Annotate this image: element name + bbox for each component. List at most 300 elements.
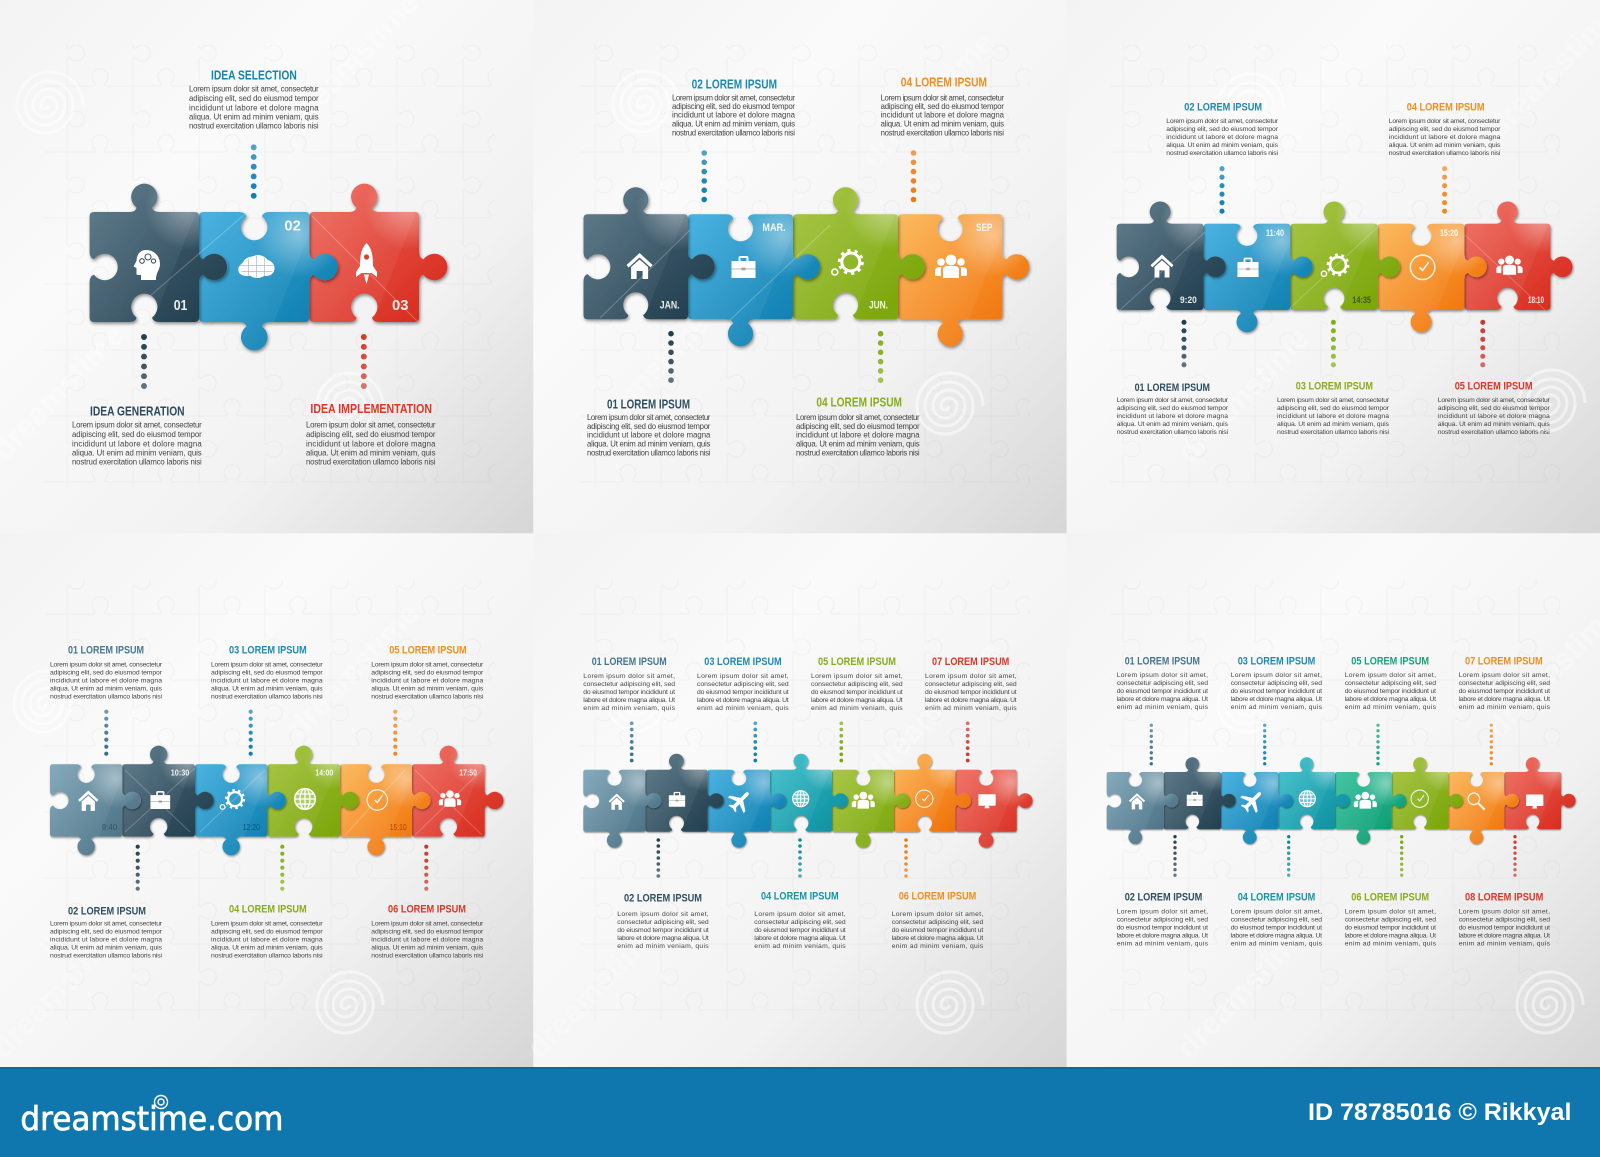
label JAN: JAN. xyxy=(660,299,680,311)
heading: 02: 02 LOREM IPSUM xyxy=(1125,891,1202,903)
text block: 07: enim ad minim veniam, quis xyxy=(1459,704,1551,711)
puzzle piece 7 red xyxy=(955,770,1033,848)
heading: 05: 05 LOREM IPSUM xyxy=(389,645,467,657)
dotted connector: 03 xyxy=(753,721,757,762)
text block: idea implementation: incididunt ut labore et dolore magna xyxy=(306,439,436,448)
text block: idea generation: Lorem ipsum dolor sit amet, consectetur xyxy=(72,421,202,430)
panel: five step puzzle timeline xyxy=(1067,0,1600,533)
text block: 07 xyxy=(925,673,1017,712)
text block: 03: aliqua. Ut enim ad minim veniam, quis xyxy=(1277,421,1390,428)
puzzle piece 1 slate xyxy=(584,187,715,319)
text block: 02: labore et dolore magna aliqua. Ut xyxy=(617,935,709,942)
heading: 04 green: 04 LOREM IPSUM xyxy=(816,394,902,409)
text block: 03: do eiusmod tempor incididunt ut xyxy=(1231,688,1322,695)
dotted connector: 06 xyxy=(424,845,428,891)
logo spiral xyxy=(154,1096,168,1108)
puzzle piece 7 orange xyxy=(1448,772,1519,844)
text block: 05: nostrud exercitation ullamco laboris nisi xyxy=(371,694,484,700)
puzzle piece 1 slate xyxy=(1117,201,1226,310)
text block: 04 orange: aliqua. Ut enim ad minim veniam, quis xyxy=(881,120,1004,129)
text block: idea selection: aliqua. Ut enim ad minim veniam, quis xyxy=(189,112,319,121)
text block: 01: Lorem ipsum dolor sit amet, consectetur xyxy=(1117,397,1229,404)
dotted connector: 05 xyxy=(393,710,397,756)
text block: 03: Lorem ipsum dolor sit amet, xyxy=(1231,672,1322,679)
puzzle piece 8 red xyxy=(1504,757,1576,829)
panel: seven step puzzle timeline: dreamstime xyxy=(860,635,1006,785)
dotted connector: 04 xyxy=(1287,835,1290,877)
text block: 05: nostrud exercitation ullamco laboris nisi xyxy=(1438,429,1550,436)
icon: people xyxy=(439,790,461,807)
heading: idea selection: IDEA SELECTION xyxy=(211,67,297,82)
puzzle piece 5 emerald xyxy=(1335,772,1406,844)
text block: 03: adipiscing elit, sed do eiusmod tempor xyxy=(1277,405,1390,412)
icon: gears xyxy=(832,250,862,275)
icon: home xyxy=(627,253,653,279)
text block: 07: consectetur adipiscing elit, sed xyxy=(925,681,1017,688)
text block: 04: incididunt ut labore et dolore magna xyxy=(211,936,323,944)
dotted connector: 04 green xyxy=(878,331,883,383)
text block: 03: labore et dolore magna aliqua. Ut xyxy=(697,697,789,704)
text block: 01 xyxy=(587,413,711,457)
icon: briefcase xyxy=(1187,791,1203,806)
text block: 04: enim ad minim veniam, quis xyxy=(754,943,846,950)
icon: briefcase xyxy=(669,792,685,807)
label 9:40: 9:40 xyxy=(102,822,118,832)
text block: idea selection: incididunt ut labore et dolore magna xyxy=(189,103,319,112)
puzzle piece 5 red xyxy=(1464,201,1573,310)
puzzle piece 4 green xyxy=(267,746,359,837)
text block: 07 xyxy=(1459,672,1551,711)
text block: 02: adipiscing elit, sed do eiusmod tempor xyxy=(672,102,795,111)
text block: 03: Lorem ipsum dolor sit amet, consectetur xyxy=(211,662,323,668)
label 03: 03 xyxy=(392,297,408,314)
heading: idea implementation: IDEA IMPLEMENTATION xyxy=(310,401,432,416)
dotted connector: idea generation xyxy=(141,334,147,389)
text block: 04: labore et dolore magna aliqua. Ut xyxy=(1231,932,1322,940)
heading: 07: 07 LOREM IPSUM xyxy=(1465,655,1543,667)
text block: 08: consectetur adipiscing elit, sed xyxy=(1459,916,1550,924)
text block: 05: labore et dolore magna aliqua. Ut xyxy=(811,697,903,704)
heading: 08: 08 LOREM IPSUM xyxy=(1465,891,1543,903)
puzzle piece 1 light slate xyxy=(583,770,661,848)
text block: 06: Lorem ipsum dolor sit amet, consectetur xyxy=(371,920,484,928)
text block: 05: incididunt ut labore et dolore magna xyxy=(371,678,484,684)
logo text: dreamstime.com xyxy=(20,1099,283,1138)
text block: 03: consectetur adipiscing elit, sed xyxy=(697,681,789,688)
text block: 06: do eiusmod tempor incididunt ut xyxy=(1345,924,1436,932)
heading: 02: 02 LOREM IPSUM xyxy=(624,892,702,904)
text block: idea selection: adipiscing elit, sed do eiusmod tempor xyxy=(189,94,319,103)
panel: eight step puzzle timeline xyxy=(1067,533,1600,1067)
footer banner xyxy=(0,1067,1600,1157)
puzzle piece 4 teal xyxy=(770,754,848,832)
text block: 01: adipiscing elit, sed do eiusmod tempor xyxy=(587,422,711,431)
puzzle piece 4 orange xyxy=(898,214,1029,346)
text block: 01: enim ad minim veniam, quis xyxy=(583,705,676,712)
text block: 03: nostrud exercitation ullamco laboris nisi xyxy=(211,694,323,700)
text block: 05: aliqua. Ut enim ad minim veniam, quis xyxy=(371,686,484,692)
puzzle piece 6 red xyxy=(412,746,503,837)
label 9:20: 9:20 xyxy=(1180,295,1197,305)
puzzle piece 1 light slate xyxy=(50,764,141,855)
text block: 04: consectetur adipiscing elit, sed xyxy=(1231,916,1322,924)
heading: 04: 04 LOREM IPSUM xyxy=(761,891,839,903)
text block: idea selection: nostrud exercitation ullamco laboris nisi xyxy=(189,122,319,131)
dotted connector: 03 xyxy=(249,710,253,756)
icon: globe xyxy=(295,789,315,809)
text block: 03: incididunt ut labore et dolore magna xyxy=(211,678,323,684)
text block: 01: nostrud exercitation ullamco laboris nisi xyxy=(587,448,711,457)
label 14:35: 14:35 xyxy=(1352,295,1371,305)
text block: 08: do eiusmod tempor incididunt ut xyxy=(1459,924,1550,932)
heading: 06: 06 LOREM IPSUM xyxy=(899,891,976,903)
text block: 06: enim ad minim veniam, quis xyxy=(892,943,984,950)
text block: 06: Lorem ipsum dolor sit amet, xyxy=(892,911,983,918)
dotted connector: 01 xyxy=(630,721,634,762)
label 11:40: 11:40 xyxy=(1266,228,1284,238)
text block: 04: aliqua. Ut enim ad minim veniam, quis xyxy=(211,944,323,952)
text block: 05: do eiusmod tempor incididunt ut xyxy=(1345,688,1436,695)
panel: three step puzzle timeline xyxy=(0,0,533,533)
label 12:20: 12:20 xyxy=(243,822,260,832)
heading: 05: 05 LOREM IPSUM xyxy=(1455,380,1532,392)
icon: globe xyxy=(793,791,809,807)
dotted connector: 07 xyxy=(1490,724,1493,765)
text block: 04: Lorem ipsum dolor sit amet, xyxy=(754,911,846,918)
panel: seven step puzzle timeline: dreamstime xyxy=(520,915,666,1065)
icon: gears xyxy=(220,790,244,809)
label 10:30: 10:30 xyxy=(171,768,190,778)
text block: idea implementation: aliqua. Ut enim ad minim veniam, quis xyxy=(306,449,436,458)
text block: 02: consectetur adipiscing elit, sed xyxy=(1117,916,1208,924)
label 17:50: 17:50 xyxy=(459,768,477,778)
text block: 08 xyxy=(1459,908,1551,948)
text block: 05: enim ad minim veniam, quis xyxy=(1345,704,1437,711)
panel: eight step puzzle timeline: dreamstime xyxy=(1170,915,1316,1065)
text block: 07: Lorem ipsum dolor sit amet, xyxy=(1459,672,1550,679)
text block: 04: consectetur adipiscing elit, sed xyxy=(754,919,846,926)
icon: globe xyxy=(1299,791,1315,807)
text block: 05: adipiscing elit, sed do eiusmod tempor xyxy=(1438,405,1551,412)
heading: 01: 01 LOREM IPSUM xyxy=(607,396,690,411)
dotted connector: 01 xyxy=(1150,724,1153,765)
dotted connector: 02 xyxy=(656,838,660,878)
text block: 04: do eiusmod tempor incididunt ut xyxy=(754,927,846,934)
heading: 03: 03 LOREM IPSUM xyxy=(704,656,782,668)
icon: clock xyxy=(916,790,933,807)
heading: 06: 06 LOREM IPSUM xyxy=(388,904,466,916)
heading: 04: 04 LOREM IPSUM xyxy=(229,904,307,916)
text block: 01: incididunt ut labore et dolore magna xyxy=(50,678,162,684)
panel background xyxy=(0,533,533,1067)
panel: six step puzzle timeline: dreamstime xyxy=(280,595,426,745)
text block: 02: do eiusmod tempor incididunt ut xyxy=(1117,924,1208,932)
text block: 02: adipiscing elit, sed do eiusmod tempor xyxy=(1166,126,1279,133)
dotted connector: 02 xyxy=(1219,166,1225,214)
text block: 01: enim ad minim veniam, quis xyxy=(1117,704,1209,711)
text block: 04: adipiscing elit, sed do eiusmod tempor xyxy=(211,928,323,936)
text block: 01: nostrud exercitation ullamco laboris nisi xyxy=(50,694,162,700)
puzzle piece 5 green xyxy=(832,770,910,848)
text block: 01 xyxy=(50,662,163,700)
text block: 04: incididunt ut labore et dolore magna xyxy=(1389,134,1501,141)
heading: 04 orange: 04 LOREM IPSUM xyxy=(901,74,987,89)
text block: 04 green: adipiscing elit, sed do eiusmod tempor xyxy=(796,422,920,431)
text block: 01 xyxy=(583,673,676,712)
text block: 06 xyxy=(371,920,484,960)
text block: 04: adipiscing elit, sed do eiusmod tempor xyxy=(1389,126,1501,133)
text block: 02: enim ad minim veniam, quis xyxy=(617,943,709,950)
text block: 03: enim ad minim veniam, quis xyxy=(697,705,789,712)
text block: 06: labore et dolore magna aliqua. Ut xyxy=(892,935,983,942)
text block: 03 xyxy=(1277,397,1390,436)
icon: people xyxy=(852,792,875,809)
icon: rocket xyxy=(356,243,377,284)
label SEP: SEP xyxy=(976,222,992,234)
label 15:20: 15:20 xyxy=(1440,228,1458,238)
puzzle piece 1 slate xyxy=(90,184,227,322)
text block: 01 xyxy=(1117,397,1229,436)
text block: 07: do eiusmod tempor incididunt ut xyxy=(925,689,1017,696)
dotted connector: 04 orange xyxy=(911,150,916,202)
text block: 04: Lorem ipsum dolor sit amet, consectetur xyxy=(1389,118,1501,125)
dotted connector: 05 xyxy=(839,721,843,762)
text block: idea implementation: nostrud exercitation ullamco laboris nisi xyxy=(306,458,436,467)
text block: 01: Lorem ipsum dolor sit amet, consectetur xyxy=(587,413,711,422)
dotted connector: 01 xyxy=(104,710,108,756)
text block: 05: enim ad minim veniam, quis xyxy=(811,705,903,712)
panel background xyxy=(0,0,533,533)
puzzle piece 1 light slate xyxy=(1107,772,1178,844)
text block: 05: consectetur adipiscing elit, sed xyxy=(811,681,903,688)
text block: 01: do eiusmod tempor incididunt ut xyxy=(1117,688,1208,695)
text block: 07: Lorem ipsum dolor sit amet, xyxy=(925,673,1017,680)
text block: 02: aliqua. Ut enim ad minim veniam, quis xyxy=(672,120,795,129)
icon: clock xyxy=(1411,790,1428,807)
text block: 04 orange: Lorem ipsum dolor sit amet, consectetur xyxy=(881,93,1004,102)
puzzle piece 4 teal xyxy=(1278,757,1350,829)
text block: 08: labore et dolore magna aliqua. Ut xyxy=(1459,932,1550,940)
text block: 02: incididunt ut labore et dolore magna xyxy=(50,936,162,944)
text block: 02 xyxy=(1166,118,1279,157)
text block: 06: do eiusmod tempor incididunt ut xyxy=(892,927,983,934)
text block: 06 xyxy=(892,911,984,950)
heading: 01: 01 LOREM IPSUM xyxy=(1135,382,1210,394)
text block: 03: aliqua. Ut enim ad minim veniam, quis xyxy=(211,686,323,692)
text block: 07: consectetur adipiscing elit, sed xyxy=(1459,680,1550,687)
icon: magnifier xyxy=(1468,793,1485,810)
text block: 03: labore et dolore magna aliqua. Ut xyxy=(1231,696,1322,703)
label 02: 02 xyxy=(284,218,301,235)
text block: 01: nostrud exercitation ullamco laboris nisi xyxy=(1117,429,1228,436)
text block: 02: Lorem ipsum dolor sit amet, consectetur xyxy=(1166,118,1279,125)
dotted connector: 01 xyxy=(668,331,674,383)
dotted connector: 02 xyxy=(701,150,707,202)
image id and credit: ID 78785016 © Rikkyal xyxy=(1308,1099,1571,1126)
heading: 02: 02 LOREM IPSUM xyxy=(68,905,146,917)
text block: 06: adipiscing elit, sed do eiusmod tempor xyxy=(371,928,484,936)
text block: 05: do eiusmod tempor incididunt ut xyxy=(811,689,903,696)
label MAR: MAR. xyxy=(762,222,786,234)
heading: 01: 01 LOREM IPSUM xyxy=(1125,655,1200,667)
dotted connector: 04 xyxy=(798,838,802,878)
text block: 04: do eiusmod tempor incididunt ut xyxy=(1231,924,1322,932)
icon: monitor xyxy=(1526,795,1543,809)
text block: 05: consectetur adipiscing elit, sed xyxy=(1345,680,1436,687)
text block: 06: incididunt ut labore et dolore magna xyxy=(371,936,484,944)
text block: idea implementation: Lorem ipsum dolor sit amet, consectetur xyxy=(306,421,436,430)
dotted connector: 03 xyxy=(1263,724,1266,765)
text block: 03: incididunt ut labore et dolore magna xyxy=(1277,413,1389,420)
text block: 04: nostrud exercitation ullamco laboris nisi xyxy=(1389,150,1501,157)
text block: 01: consectetur adipiscing elit, sed xyxy=(1117,680,1208,687)
text block: idea implementation xyxy=(306,421,436,467)
puzzle piece 2 blue xyxy=(688,214,820,346)
panel background xyxy=(1067,0,1600,533)
text block: 04: Lorem ipsum dolor sit amet, xyxy=(1231,908,1322,916)
text block: 02: nostrud exercitation ullamco laboris nisi xyxy=(50,952,162,960)
heading: 03: 03 LOREM IPSUM xyxy=(1296,380,1373,392)
puzzle piece 2 blue xyxy=(1204,224,1313,332)
icon: clock xyxy=(1410,255,1435,280)
icon: airplane xyxy=(724,785,756,817)
text block: 07: do eiusmod tempor incididunt ut xyxy=(1459,688,1550,695)
text block: 02: nostrud exercitation ullamco laboris nisi xyxy=(1166,150,1278,157)
text block: 01: adipiscing elit, sed do eiusmod tempor xyxy=(1117,405,1229,412)
text block: 03: Lorem ipsum dolor sit amet, xyxy=(697,673,789,680)
text block: 06: nostrud exercitation ullamco laboris nisi xyxy=(371,952,484,960)
heading: 06: 06 LOREM IPSUM xyxy=(1351,891,1429,903)
text block: 02: incididunt ut labore et dolore magna xyxy=(672,111,796,120)
panel: four step puzzle timeline: dreamstime xyxy=(855,25,1001,175)
heading: 02: 02 LOREM IPSUM xyxy=(692,76,777,91)
text block: 03: do eiusmod tempor incididunt ut xyxy=(697,689,789,696)
text block: 04: aliqua. Ut enim ad minim veniam, quis xyxy=(1389,142,1501,149)
text block: idea generation xyxy=(72,421,202,467)
icon: brain xyxy=(238,255,275,278)
text block: 07: enim ad minim veniam, quis xyxy=(925,705,1017,712)
text block: 05 xyxy=(811,673,903,712)
text block: 07: labore et dolore magna aliqua. Ut xyxy=(1459,696,1550,703)
text block: 04 orange: adipiscing elit, sed do eiusmod tempor xyxy=(881,102,1004,111)
puzzle piece 2 blue xyxy=(199,212,338,350)
puzzle piece 6 orange xyxy=(894,754,971,832)
text block: 04 green: aliqua. Ut enim ad minim veniam, quis xyxy=(796,440,920,449)
text block: 01: adipiscing elit, sed do eiusmod tempor xyxy=(50,670,163,676)
icon: monitor xyxy=(978,794,996,808)
text block: 01: incididunt ut labore et dolore magna xyxy=(587,431,711,440)
text block: 02: Lorem ipsum dolor sit amet, consectetur xyxy=(50,920,163,928)
dotted connector: 06 xyxy=(904,838,908,878)
text block: 04 xyxy=(1389,118,1501,157)
heading: 01: 01 LOREM IPSUM xyxy=(592,656,667,668)
label JUN: JUN. xyxy=(869,299,888,311)
text block: 05: aliqua. Ut enim ad minim veniam, quis xyxy=(1438,421,1550,428)
dotted connector: 02 xyxy=(1173,835,1177,877)
text block: 01: labore et dolore magna aliqua. Ut xyxy=(583,697,675,704)
text block: 04 green: incididunt ut labore et dolore magna xyxy=(796,431,920,440)
text block: 03 xyxy=(1231,672,1323,711)
text block: idea implementation: adipiscing elit, sed do eiusmod tempor xyxy=(306,430,436,439)
heading: 03: 03 LOREM IPSUM xyxy=(1238,655,1315,667)
text block: 05: adipiscing elit, sed do eiusmod tempor xyxy=(371,670,484,676)
icon: clock xyxy=(367,790,388,810)
heading: 05: 05 LOREM IPSUM xyxy=(1351,655,1429,667)
text block: 04 green: Lorem ipsum dolor sit amet, consectetur xyxy=(796,413,920,422)
dotted connector: 02 xyxy=(136,845,140,891)
text block: 02 xyxy=(50,920,163,960)
heading: 07: 07 LOREM IPSUM xyxy=(932,656,1009,668)
dotted connector: 05 xyxy=(1480,320,1485,367)
puzzle piece 5 orange xyxy=(340,764,431,855)
heading: 05: 05 LOREM IPSUM xyxy=(818,656,896,668)
icon: airplane xyxy=(1236,785,1269,817)
label 15:10: 15:10 xyxy=(390,822,407,832)
text block: 06: aliqua. Ut enim ad minim veniam, quis xyxy=(371,944,484,952)
label 18:10: 18:10 xyxy=(1528,295,1544,305)
panel: seven step puzzle timeline xyxy=(520,533,1067,1067)
heading: idea generation: IDEA GENERATION xyxy=(90,404,185,419)
puzzle piece 2 slate xyxy=(1164,757,1236,829)
text block: 01: incididunt ut labore et dolore magna xyxy=(1117,413,1228,420)
dotted connector: 08 xyxy=(1513,835,1517,877)
text block: 02 xyxy=(672,93,796,138)
text block: idea generation: incididunt ut labore et dolore magna xyxy=(72,439,202,448)
icon: briefcase xyxy=(732,256,756,278)
text block: 04: labore et dolore magna aliqua. Ut xyxy=(754,935,846,942)
text block: 04 orange: incididunt ut labore et dolore magna xyxy=(881,111,1005,120)
text block: 01: aliqua. Ut enim ad minim veniam, quis xyxy=(1117,421,1229,428)
text block: 02: Lorem ipsum dolor sit amet, consectetur xyxy=(672,93,795,102)
panel: six step puzzle timeline xyxy=(0,533,533,1067)
text block: 01: Lorem ipsum dolor sit amet, consectetur xyxy=(50,662,163,668)
text block: 08: Lorem ipsum dolor sit amet, xyxy=(1459,908,1550,916)
text block: 06: consectetur adipiscing elit, sed xyxy=(1345,916,1436,924)
text block: 01: Lorem ipsum dolor sit amet, xyxy=(1117,672,1208,679)
panel background xyxy=(533,533,1067,1067)
text block: 05: labore et dolore magna aliqua. Ut xyxy=(1345,696,1436,703)
text block: idea selection: Lorem ipsum dolor sit amet, consectetur xyxy=(189,85,319,94)
text block: 05 xyxy=(1345,672,1437,711)
puzzle piece 2 slate xyxy=(645,754,724,832)
text block: 05: incididunt ut labore et dolore magna xyxy=(1438,413,1550,420)
text block: 05: Lorem ipsum dolor sit amet, xyxy=(811,673,903,680)
text block: 02 xyxy=(617,911,709,950)
text block: 05: Lorem ipsum dolor sit amet, consectetur xyxy=(1438,397,1551,404)
text block: 05: Lorem ipsum dolor sit amet, consectetur xyxy=(371,662,484,668)
dotted connector: idea selection xyxy=(251,144,257,199)
text block: 05 xyxy=(371,662,484,700)
text block: 08: enim ad minim veniam, quis xyxy=(1459,940,1551,948)
text block: idea generation: nostrud exercitation ullamco laboris nisi xyxy=(72,458,202,467)
text block: idea generation: aliqua. Ut enim ad minim veniam, quis xyxy=(72,449,202,458)
text block: 02: consectetur adipiscing elit, sed xyxy=(617,919,709,926)
text block: 06: labore et dolore magna aliqua. Ut xyxy=(1345,932,1436,940)
text block: 01: Lorem ipsum dolor sit amet, xyxy=(583,673,675,680)
label 14:00: 14:00 xyxy=(315,768,334,778)
icon: head with gears xyxy=(134,250,160,280)
text block: 02: labore et dolore magna aliqua. Ut xyxy=(1117,932,1208,940)
panel background xyxy=(533,0,1067,533)
heading: 02: 02 LOREM IPSUM xyxy=(1184,101,1262,113)
text block: 02: aliqua. Ut enim ad minim veniam, quis xyxy=(1166,142,1279,149)
text block: 02: Lorem ipsum dolor sit amet, xyxy=(617,911,709,918)
dotted connector: 05 xyxy=(1376,724,1380,765)
dotted connector: idea implementation xyxy=(361,334,367,389)
icon: home xyxy=(1129,793,1145,809)
heading: 04: 04 LOREM IPSUM xyxy=(1238,891,1315,903)
text block: 03: adipiscing elit, sed do eiusmod tempor xyxy=(211,670,323,676)
